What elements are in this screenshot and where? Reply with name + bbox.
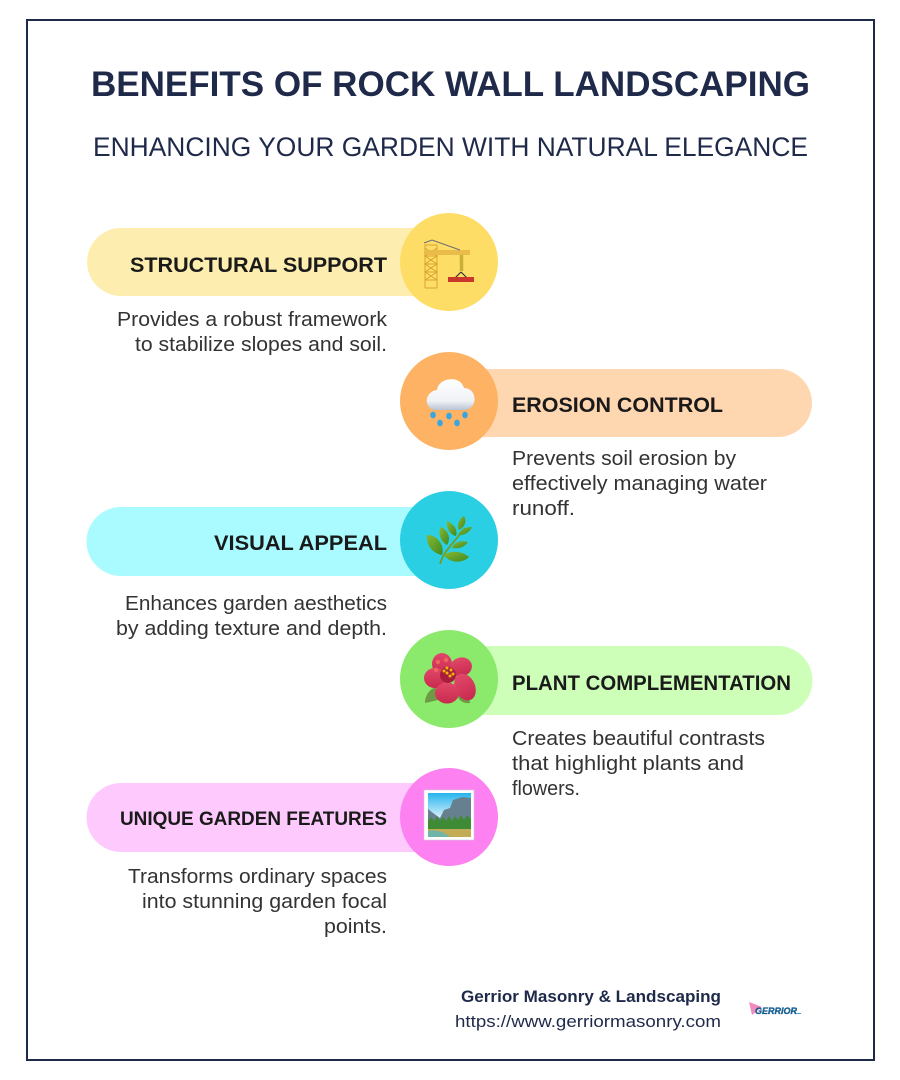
heading: EROSION CONTROL	[512, 393, 723, 417]
heading: UNIQUE GARDEN FEATURES	[120, 808, 387, 830]
description	[128, 865, 387, 938]
icon circle	[400, 352, 498, 450]
description: Creates beautiful contrasts	[512, 727, 765, 750]
pill	[87, 783, 449, 852]
pill	[87, 228, 449, 296]
logo	[749, 1002, 801, 1016]
panel: erosion control	[400, 352, 812, 520]
panel: structural support	[87, 213, 498, 356]
icon: herb	[427, 516, 472, 564]
heading: VISUAL APPEAL	[214, 531, 387, 555]
title: BENEFITS OF ROCK WALL LANDSCAPING	[91, 65, 810, 104]
panel: plant complementation	[400, 630, 813, 800]
description	[116, 592, 387, 640]
description	[117, 308, 388, 356]
description: Prevents soil erosion by	[512, 447, 737, 470]
icon: framed landscape	[424, 790, 474, 840]
icon circle	[400, 491, 498, 589]
pill	[449, 369, 812, 437]
description: into stunning garden focal	[142, 890, 387, 913]
panel: visual appeal	[87, 491, 498, 640]
pill	[87, 507, 449, 576]
description: runoff.	[512, 497, 575, 520]
description: Provides a robust framework	[117, 308, 388, 331]
footer company name: Gerrior Masonry & Landscaping	[461, 988, 721, 1006]
icon circle	[400, 213, 498, 311]
description	[512, 727, 765, 800]
icon: hibiscus	[424, 653, 480, 704]
description: flowers.	[512, 777, 580, 800]
heading: PLANT COMPLEMENTATION	[512, 671, 791, 695]
description: to stabilize slopes and soil.	[135, 333, 387, 356]
heading: STRUCTURAL SUPPORT	[130, 253, 387, 277]
icon: rain cloud	[427, 379, 474, 426]
description: that highlight plants and	[512, 752, 744, 775]
icon: crane	[424, 240, 474, 288]
footer url: https://www.gerriormasonry.com	[455, 1012, 721, 1031]
icon circle	[400, 768, 498, 866]
description	[512, 447, 767, 520]
description: by adding texture and depth.	[116, 617, 387, 640]
description: Transforms ordinary spaces	[128, 865, 387, 888]
subtitle: ENHANCING YOUR GARDEN WITH NATURAL ELEGANCE	[93, 132, 808, 162]
description: effectively managing water	[512, 472, 767, 495]
panel: unique garden features	[87, 768, 498, 938]
description: Enhances garden aesthetics	[125, 592, 387, 615]
description: points.	[324, 915, 387, 938]
icon circle	[400, 630, 498, 728]
logo: GERRIOR	[755, 1006, 797, 1016]
pill	[449, 646, 813, 715]
